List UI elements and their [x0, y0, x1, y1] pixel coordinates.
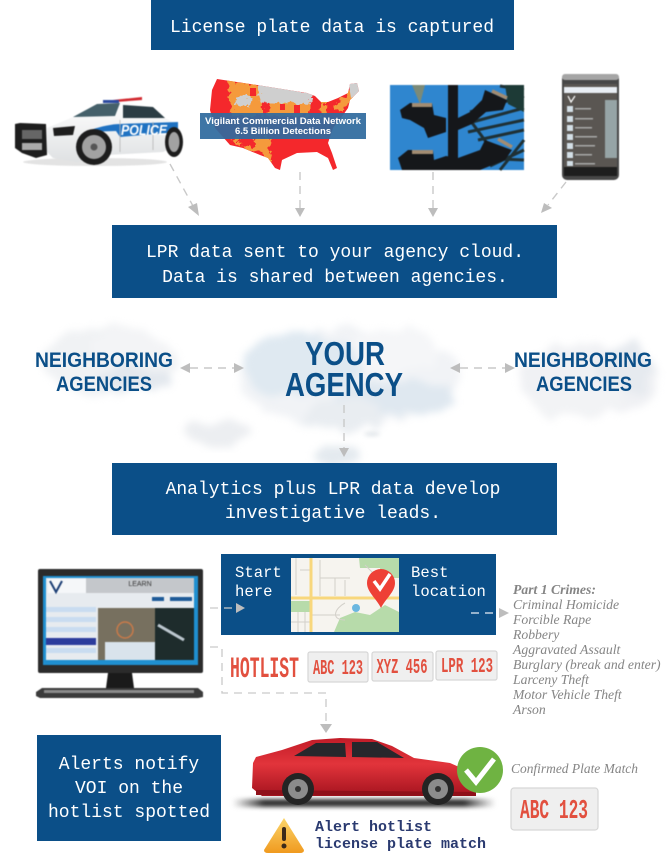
cloud: left neighboring agencies	[35, 329, 176, 396]
plate: ABC 123	[308, 652, 368, 682]
text: alert hotlist license plate match: license plate match	[315, 836, 486, 853]
text block: part 1 crimes: Part 1 Crimes:	[513, 582, 596, 597]
text: start here: Start	[235, 564, 282, 582]
text block: part 1 crimes: Burglary (break and enter)	[513, 657, 661, 673]
banner: network label: 6.5 Billion Detections	[235, 126, 331, 137]
arrow: your agency to analytics	[339, 405, 349, 457]
text block: part 1 crimes: Robbery	[512, 627, 560, 642]
heading: license plate data is captured: License plate data is captured	[170, 18, 494, 38]
text box: alerts notify: Alerts notify	[59, 755, 199, 775]
icon: desktop monitor with LEARN software	[36, 569, 203, 698]
text: alert hotlist license plate match	[315, 819, 486, 853]
arrow: hotlist connector to car	[210, 647, 332, 733]
heading: license plate data is captured	[151, 0, 514, 50]
text: best location	[411, 564, 486, 601]
arrow: left agency exchange	[180, 363, 244, 373]
label: hotlist: HOTLIST	[230, 653, 299, 687]
arrow: police car to cloud	[170, 164, 199, 216]
panel: start here map best location	[221, 554, 496, 635]
banner: network label: Vigilant Commercial Data Network	[205, 116, 362, 127]
text box: alerts notify: hotlist spotted	[48, 803, 210, 823]
text block: part 1 crimes: Aggravated Assault	[512, 642, 622, 657]
icon: smartphone app	[562, 74, 619, 180]
text block: part 1 crimes: Larceny Theft	[512, 672, 590, 687]
map tile	[291, 558, 399, 632]
text block: part 1 crimes	[512, 582, 661, 717]
cloud: your agency: AGENCY	[285, 366, 403, 403]
text box: alerts notify: VOI on the	[75, 779, 183, 799]
photo: LPR cameras on a pole	[390, 85, 524, 170]
text box: analytics plus LPR data	[112, 463, 557, 535]
text block: part 1 crimes: Forcible Rape	[512, 612, 591, 627]
plate: confirmed ABC 123: ABC 123	[520, 797, 588, 827]
plate: LPR 123	[436, 651, 497, 680]
text box: LPR data sent to agency cloud: Data is shared between agencies.	[162, 268, 508, 288]
text box: LPR data sent to agency cloud	[112, 225, 557, 298]
plate: LPR 123: LPR 123	[441, 656, 493, 679]
cloud: left neighboring agencies: NEIGHBORING	[35, 349, 173, 372]
arrow: panel to part 1 crimes	[499, 608, 509, 618]
text: best location: location	[411, 583, 486, 601]
text: start here: here	[235, 583, 272, 601]
icon: green check badge	[457, 747, 503, 793]
plate: confirmed ABC 123	[511, 788, 598, 830]
icon: warning triangle	[264, 818, 304, 853]
icon: red car	[232, 738, 496, 807]
cloud: left neighboring agencies: AGENCIES	[56, 373, 152, 396]
icon: police car: POLICE	[121, 122, 168, 139]
icon: desktop monitor with LEARN software: LEARN	[128, 581, 152, 588]
icon: police car	[15, 97, 183, 166]
plate: XYZ 456: XYZ 456	[376, 657, 428, 680]
arrow: map to cloud	[295, 172, 305, 217]
banner: network label	[200, 113, 366, 139]
arrow: phone to cloud	[541, 182, 566, 213]
cloud: right neighboring agencies: AGENCIES	[536, 373, 632, 396]
cloud: your agency: YOUR	[305, 335, 385, 372]
text block: part 1 crimes: Criminal Homicide	[513, 597, 619, 612]
cloud: right neighboring agencies	[514, 342, 660, 416]
text box: analytics plus LPR data: investigative leads.	[225, 504, 441, 524]
text: start here	[235, 564, 282, 601]
plate: XYZ 456	[372, 652, 433, 681]
arrow: cameras to cloud	[428, 172, 438, 217]
text: alert hotlist license plate match: Alert hotlist	[315, 819, 432, 836]
chart: US detections map	[200, 79, 366, 170]
arrow: right agency exchange	[450, 363, 515, 373]
cloud: small decorative clouds	[186, 419, 380, 465]
cloud: your agency	[238, 326, 462, 431]
text box: analytics plus LPR data: Analytics plus LPR data develop	[166, 480, 500, 500]
text block: part 1 crimes: Arson	[512, 702, 546, 717]
plate: ABC 123: ABC 123	[313, 658, 363, 681]
text box: LPR data sent to agency cloud: LPR data sent to your agency cloud.	[146, 243, 524, 263]
text box: alerts notify	[37, 735, 221, 841]
cloud: right neighboring agencies: NEIGHBORING	[514, 349, 652, 372]
arrow: monitor to start here	[210, 603, 245, 613]
text: best location: Best	[411, 564, 448, 582]
icon: red location pin with check	[367, 569, 395, 608]
text: confirmed plate match: Confirmed Plate Match	[511, 761, 638, 776]
text block: part 1 crimes: Motor Vehicle Theft	[512, 687, 623, 702]
